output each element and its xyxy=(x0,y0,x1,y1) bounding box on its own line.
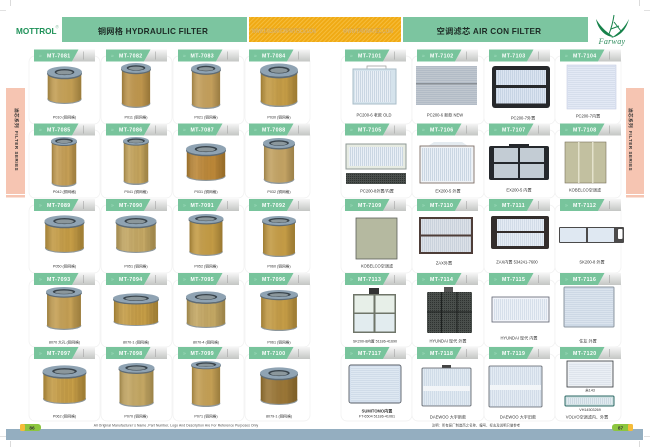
cell MT-7104 xyxy=(555,50,621,124)
caption: DAEWOO 大宇旧款 xyxy=(500,414,536,420)
tag: MT-7118 xyxy=(430,351,453,357)
cell MT-7089 xyxy=(29,199,100,273)
tag: » xyxy=(565,54,568,60)
tag: MT-7094 xyxy=(119,277,143,283)
tag: » xyxy=(183,128,186,134)
filter xyxy=(260,367,298,405)
tag xyxy=(34,50,95,62)
filter xyxy=(260,63,298,107)
cell MT-7082 xyxy=(101,50,172,124)
header: hydraulic filter: 铜网格 HYDRAULIC FILTER xyxy=(98,26,208,36)
tag: » xyxy=(254,54,257,60)
cell MT-7087 xyxy=(173,124,244,198)
cell MT-7119 xyxy=(484,347,555,421)
caption: P071 (铜网格) xyxy=(194,414,218,418)
air filter xyxy=(489,144,549,180)
filter xyxy=(47,66,82,104)
cell MT-7106 xyxy=(412,124,484,198)
tag: MT-7112 xyxy=(573,203,596,209)
tag: MT-7086 xyxy=(119,128,143,134)
air filter xyxy=(353,288,396,333)
tag xyxy=(106,347,167,359)
caption: HYUNDAI 现代 内置 xyxy=(500,334,538,340)
tag xyxy=(417,124,478,136)
side tab left xyxy=(6,88,25,198)
air filter xyxy=(559,227,624,243)
cell MT-7103 xyxy=(484,50,555,124)
tag xyxy=(560,199,621,211)
cell MT-7081 xyxy=(29,50,100,124)
tag: » xyxy=(39,203,42,209)
logo: Farway: Farway xyxy=(598,37,625,46)
tag xyxy=(106,50,167,62)
caption: HYUNDAI 现代 外置 xyxy=(429,338,467,344)
bottom bar xyxy=(6,429,643,440)
tag: MT-7104 xyxy=(573,54,597,60)
tag: » xyxy=(254,128,257,134)
cell MT-7088 xyxy=(245,124,310,198)
tag: MT-7110 xyxy=(430,203,453,209)
tag: » xyxy=(422,351,425,357)
tag xyxy=(489,50,550,62)
caption: VOLVO空调滤内、外置 xyxy=(566,414,608,420)
filter xyxy=(46,287,82,330)
air filter xyxy=(565,142,606,183)
cell MT-7111 xyxy=(484,199,555,273)
caption: 8070 大孔 (铜网格) xyxy=(49,340,80,344)
tag xyxy=(249,199,310,211)
tag xyxy=(34,199,95,211)
caption: KOBELCO空调滤 xyxy=(569,186,601,192)
tag: » xyxy=(183,54,186,60)
tag xyxy=(417,50,478,62)
cell MT-7118 xyxy=(412,347,484,421)
cell MT-7092 xyxy=(245,199,310,273)
tag xyxy=(489,124,550,136)
tag: MT-7111 xyxy=(502,203,525,209)
tag xyxy=(249,50,310,62)
tag: » xyxy=(565,128,568,134)
caption: P031 (铜网格) xyxy=(194,189,218,194)
cell MT-7110 xyxy=(412,199,484,273)
tag xyxy=(345,347,406,359)
filter xyxy=(118,363,154,407)
filter xyxy=(116,215,156,253)
air filter xyxy=(419,217,473,254)
tag: » xyxy=(494,54,497,60)
caption: P032 (铜网格) xyxy=(267,189,291,194)
page number left: 86 xyxy=(29,426,35,432)
tag: » xyxy=(494,351,497,357)
tag: MT-7106 xyxy=(430,128,454,134)
air filter xyxy=(353,66,396,104)
tag: MT-7098 xyxy=(119,351,143,357)
air filter xyxy=(420,142,474,183)
side tab right: 滤芯系列 xyxy=(627,108,634,128)
cell MT-7101 xyxy=(341,50,412,124)
tag: » xyxy=(183,203,186,209)
tag xyxy=(345,124,406,136)
cell MT-7083 xyxy=(173,50,244,124)
tag: » xyxy=(350,203,353,209)
header: hydraulic filter xyxy=(62,17,247,42)
caption: 8079-1 (铜网格) xyxy=(266,414,292,418)
header: air con filter: 空调滤芯 AIR CON FILTER xyxy=(437,26,541,36)
caption: P030 (铜网格) xyxy=(267,114,291,120)
caption: PC200-8外置/内置 xyxy=(360,188,394,194)
air filter xyxy=(346,144,406,184)
tag: MT-7096 xyxy=(262,277,286,283)
tag: » xyxy=(183,277,186,283)
tag: MT-7119 xyxy=(502,351,525,357)
tag xyxy=(417,347,478,359)
tag: » xyxy=(254,203,257,209)
cell MT-7099 xyxy=(173,347,244,421)
tag: MT-7085 xyxy=(47,128,71,134)
cell MT-7108 xyxy=(555,124,621,198)
caption: P061 (铜网格) xyxy=(267,340,291,344)
tag: » xyxy=(111,277,114,283)
caption: ZAX内置 534241-7600 xyxy=(496,258,538,264)
header: orange website band: WWW.EXCAVATORPARTSCN.COM xyxy=(252,28,316,35)
filter xyxy=(121,63,151,108)
caption: P042 (铜网格) xyxy=(53,189,76,194)
tag: MT-7088 xyxy=(262,128,286,134)
tag xyxy=(417,273,478,285)
side tab right: FILTER SERIES xyxy=(628,131,633,171)
cell MT-7113 xyxy=(341,273,412,347)
cell MT-7095 xyxy=(173,273,244,347)
cell MT-7112 xyxy=(555,199,624,273)
cell MT-7093 xyxy=(29,273,100,347)
footer note right: 注明：所有原厂制造商之名称、编号、标志及说明只做参考 xyxy=(432,422,521,428)
tag xyxy=(489,273,550,285)
caption: 住友 外置 xyxy=(579,338,597,344)
logo: MOTTROL: MOTTROL xyxy=(16,27,56,36)
tag: MT-7100 xyxy=(262,351,286,357)
side tab right xyxy=(626,88,644,198)
logo: MOTTROL: ® xyxy=(56,24,60,30)
tag: » xyxy=(494,128,497,134)
cell MT-7091 xyxy=(173,199,244,273)
cell MT-7100 xyxy=(245,347,310,421)
caption: P011 (铜网格) xyxy=(125,114,147,120)
tag: MT-7099 xyxy=(190,351,214,357)
tag: » xyxy=(39,351,42,357)
caption: KOBELCO空调滤 xyxy=(361,262,393,268)
caption: P070 (铜网格) xyxy=(124,414,148,418)
side tab left: FILTER SERIES xyxy=(14,131,19,171)
tag: » xyxy=(494,277,497,283)
air filter xyxy=(349,365,401,403)
tag xyxy=(34,124,95,136)
tag: MT-7095 xyxy=(190,277,214,283)
air filter xyxy=(489,366,542,407)
cell MT-7105 xyxy=(341,124,412,198)
tag: MT-7081 xyxy=(47,54,71,60)
page number left xyxy=(20,424,41,432)
tag: MT-7105 xyxy=(358,128,382,134)
tag: » xyxy=(111,203,114,209)
tag: » xyxy=(254,351,257,357)
caption: P010 (铜网格) xyxy=(53,114,76,120)
tag xyxy=(249,273,310,285)
tag: » xyxy=(111,351,114,357)
page number right xyxy=(612,424,633,432)
tag: MT-7107 xyxy=(502,128,526,134)
filter xyxy=(51,137,77,187)
air filter xyxy=(356,218,397,259)
side tab left: 滤芯系列 xyxy=(13,108,20,128)
tag: MT-7115 xyxy=(502,277,525,283)
cell MT-7097 xyxy=(29,347,100,421)
filter xyxy=(42,365,86,404)
tag: MT-7108 xyxy=(573,128,597,134)
air filter xyxy=(567,65,616,109)
caption: SK200-8内置 51186-41690 xyxy=(353,338,397,344)
tag: MT-7116 xyxy=(573,277,596,283)
tag: » xyxy=(350,128,353,134)
tag: MT-7089 xyxy=(47,203,71,209)
tag xyxy=(417,199,478,211)
tag: MT-7117 xyxy=(358,351,381,357)
tag: MT-7082 xyxy=(119,54,143,60)
cell MT-7085 xyxy=(29,124,100,198)
tag: » xyxy=(39,128,42,134)
tag: » xyxy=(350,277,353,283)
cell MT-7090 xyxy=(101,199,172,273)
caption xyxy=(359,408,395,418)
cell MT-7107 xyxy=(484,124,555,198)
tag xyxy=(489,199,550,211)
tag: » xyxy=(422,128,425,134)
tag: » xyxy=(350,351,353,357)
tag xyxy=(560,124,621,136)
caption: DAEWOO 大宇新款 xyxy=(430,414,466,420)
tag: MT-7103 xyxy=(502,54,526,60)
air filter xyxy=(422,365,471,406)
tag xyxy=(345,273,406,285)
tag xyxy=(178,199,239,211)
tag xyxy=(178,124,239,136)
tag: MT-7091 xyxy=(190,203,214,209)
tag: » xyxy=(254,277,257,283)
filter xyxy=(263,138,295,184)
cell MT-7109 xyxy=(341,199,412,273)
cell MT-7115 xyxy=(484,273,555,347)
tag: » xyxy=(39,277,42,283)
tag xyxy=(345,50,406,62)
cell MT-7086 xyxy=(101,124,172,198)
caption: 8070-4 (铜网格) xyxy=(193,340,219,344)
caption: 8070-1 (铜网格) xyxy=(123,340,149,344)
cell MT-7084 xyxy=(245,50,310,124)
air filter xyxy=(491,216,549,249)
tag: » xyxy=(422,54,425,60)
caption: PC200-7外置 xyxy=(511,114,535,120)
tag: MT-7102 xyxy=(430,54,454,60)
caption: SK200-8 外置 xyxy=(579,258,605,264)
caption: FT-6504 51186-41061 xyxy=(359,414,395,418)
tag: » xyxy=(565,351,568,357)
caption: P062 (铜网格) xyxy=(53,414,76,418)
tag: » xyxy=(39,54,42,60)
tag: » xyxy=(183,351,186,357)
filter xyxy=(186,291,226,328)
air filter upper xyxy=(567,361,613,387)
tag xyxy=(560,50,621,62)
tag xyxy=(106,273,167,285)
tag: » xyxy=(111,128,114,134)
tag: MT-7084 xyxy=(262,54,286,60)
air filter xyxy=(564,287,614,327)
tag: MT-7097 xyxy=(47,351,71,357)
tag xyxy=(178,347,239,359)
air filter lower xyxy=(565,396,614,406)
tag: MT-7114 xyxy=(430,277,453,283)
tag xyxy=(106,199,167,211)
air filter xyxy=(492,297,549,322)
caption: PC200-7内置 xyxy=(576,112,600,118)
filter xyxy=(44,215,84,253)
caption: P052 (铜网格) xyxy=(194,264,218,268)
caption: PC200-6 老款 OLD xyxy=(356,112,392,118)
tag: MT-7092 xyxy=(262,203,286,209)
tag: » xyxy=(565,277,568,283)
cell MT-7098 xyxy=(101,347,172,421)
air filter xyxy=(492,66,550,108)
filter xyxy=(188,214,224,256)
caption: SUMITOMO内置 xyxy=(362,408,392,414)
tag: MT-7087 xyxy=(190,128,214,134)
tag: » xyxy=(350,54,353,60)
tag xyxy=(249,124,310,136)
filter xyxy=(262,216,296,257)
tag xyxy=(34,273,95,285)
tag xyxy=(249,347,310,359)
logo: Farway xyxy=(596,15,629,46)
tag xyxy=(178,273,239,285)
page number right: 87 xyxy=(618,426,623,432)
tag: MT-7090 xyxy=(119,203,143,209)
tag xyxy=(34,347,95,359)
tag: MT-7113 xyxy=(358,277,381,283)
tag xyxy=(106,124,167,136)
caption: P051 (铜网格) xyxy=(124,264,148,268)
air filter xyxy=(427,287,472,333)
tag xyxy=(489,347,550,359)
filter xyxy=(123,137,149,185)
tag: » xyxy=(111,54,114,60)
tag xyxy=(345,199,406,211)
tag: MT-7109 xyxy=(358,203,382,209)
caption: EX200-5 内置 xyxy=(506,186,532,192)
caption: P021 (铜网格) xyxy=(194,114,218,120)
caption: PC200-6 新款 NEW xyxy=(427,112,463,118)
tag: » xyxy=(494,203,497,209)
part number upper: 未143 xyxy=(585,388,595,392)
cell MT-7116 xyxy=(555,273,621,347)
tag xyxy=(560,347,621,359)
header: orange website band xyxy=(249,17,401,42)
footer note left: All Original Manufacturer`s Name ,Part Number, Logo And Description Are For Reference Purposes Only xyxy=(94,424,258,428)
tag: MT-7083 xyxy=(190,54,214,60)
cell MT-7120 xyxy=(555,347,621,421)
caption: P041 (铜网格) xyxy=(124,189,148,194)
tag xyxy=(560,273,621,285)
header: orange website band: WWW.FARWAYEZ.COM xyxy=(343,28,393,35)
filter xyxy=(191,64,221,109)
filter xyxy=(260,290,298,331)
tag: MT-7093 xyxy=(47,277,71,283)
caption: ZAX外置 xyxy=(436,260,452,266)
header: air con filter xyxy=(403,17,588,42)
cell MT-7102 xyxy=(412,50,484,124)
tag: MT-7101 xyxy=(358,54,382,60)
cell MT-7096 xyxy=(245,273,310,347)
tag: » xyxy=(565,203,568,209)
filter xyxy=(191,361,221,407)
tag: MT-7120 xyxy=(573,351,597,357)
cell MT-7114 xyxy=(412,273,484,347)
cell MT-7094 xyxy=(101,273,172,347)
filter xyxy=(186,143,226,181)
caption: P050 (铜网格) xyxy=(53,264,76,268)
caption: EX200-5 外置 xyxy=(435,188,461,194)
part number lower: VH14503269 xyxy=(579,408,601,412)
cell MT-7117 xyxy=(341,347,412,421)
filter xyxy=(113,293,159,326)
air filter xyxy=(416,66,477,105)
caption: P060 (铜网格) xyxy=(267,264,291,268)
tag: » xyxy=(422,203,425,209)
tag: » xyxy=(422,277,425,283)
tag xyxy=(178,50,239,62)
logo: MOTTROL xyxy=(16,24,60,36)
